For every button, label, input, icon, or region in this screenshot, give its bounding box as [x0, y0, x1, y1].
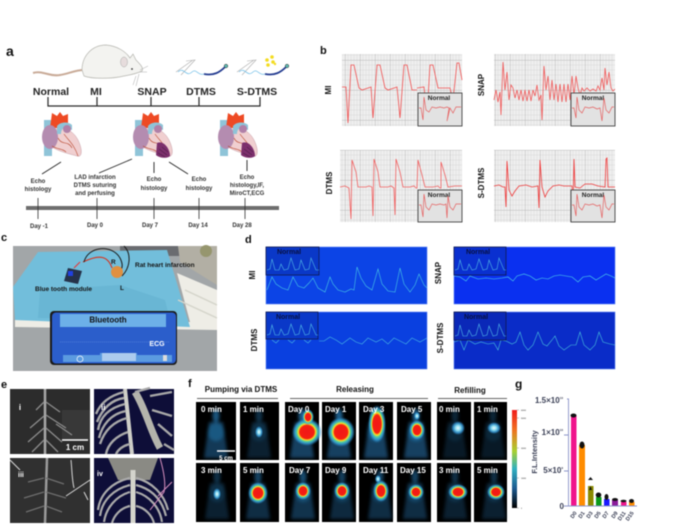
leader lines: [42, 159, 247, 174]
group labels: Normal: [33, 86, 69, 98]
y axis labels: 0: [560, 502, 565, 511]
timeline notes: Echo: [240, 175, 255, 181]
y axis labels: 10: [560, 428, 563, 432]
panel letter g: g: [515, 377, 522, 391]
chart: SNAP ECG: [494, 54, 615, 126]
x axis labels: D11: [617, 511, 628, 522]
tile: 5 min: [240, 463, 279, 522]
timeline notes: Echo: [147, 177, 162, 183]
monitor row labels: [248, 261, 445, 353]
colour scale: 30000: [521, 448, 526, 450]
tile: 0 min: 0 min: [201, 405, 222, 414]
group labels: SNAP: [137, 86, 167, 98]
inset: normal: Normal: [276, 314, 300, 321]
chart row labels: DTMS: [325, 171, 334, 194]
inset: normal: Normal: [428, 95, 450, 102]
panel letter f: f: [188, 378, 192, 390]
tile: Day 5: [397, 402, 431, 460]
inset: normal: [454, 247, 506, 275]
icon: DTMS device: [176, 60, 228, 75]
tile: 3 min: 3 min: [201, 466, 222, 475]
tile: Day 0: Day 0: [288, 405, 310, 414]
inset: normal: [266, 247, 319, 275]
image iv: iv: [97, 471, 103, 478]
tile: 5 min: 5 min: [243, 466, 264, 475]
panel letter a: a: [6, 43, 14, 59]
tile: 1 min: [240, 402, 279, 460]
scale bar: 5 cm: [219, 456, 233, 462]
tile: Day 15: Day 15: [400, 466, 426, 475]
panel letter e: e: [1, 379, 7, 391]
section headings: Refilling: [454, 386, 486, 395]
tile: Day 7: [285, 463, 319, 522]
photo annotations: L: [120, 285, 124, 292]
timeline notes: histology: [25, 187, 52, 193]
tile: 1 min: 1 min: [243, 405, 264, 414]
group labels: DTMS: [186, 86, 216, 98]
x axis labels: D15: [625, 511, 636, 522]
photo annotations: Rat heart infarction: [135, 262, 195, 269]
chart row labels: [324, 73, 486, 198]
inset: normal: Normal: [428, 192, 450, 199]
image i: i: [19, 403, 21, 412]
x axis labels: D0: [570, 511, 579, 520]
group labels: [33, 86, 277, 98]
tile: Day 9: Day 9: [325, 466, 347, 475]
inset: normal: Normal: [582, 95, 604, 102]
group labels: MI: [90, 86, 102, 98]
panel g: bar chart: [515, 377, 637, 522]
panel c: photo of Bluetooth ECG setup: [1, 232, 217, 371]
inset: normal: [266, 312, 318, 339]
phone: ECG: [149, 341, 165, 348]
image iii: iii: [18, 472, 24, 479]
chart row labels: SNAP: [477, 73, 486, 96]
colour scale: 50000: [521, 418, 526, 420]
monitor: DTMS: [266, 312, 427, 369]
monitor row labels: MI: [248, 271, 257, 279]
inset: normal: Normal: [277, 249, 301, 256]
chart: DTMS ECG: [340, 150, 462, 222]
y axis labels: [535, 396, 565, 511]
photo annotations: [35, 259, 195, 293]
photo annotations: Blue tooth module: [35, 286, 92, 293]
inset: normal: Normal: [464, 314, 488, 321]
timeline notes: LAD infarction: [74, 175, 116, 181]
panel b: ECG charts: [320, 45, 615, 222]
monitor: SNAP: [454, 247, 615, 304]
panel letter c: c: [1, 232, 7, 244]
tile: Day 5: Day 5: [401, 405, 423, 414]
y axis labels: 10: [560, 396, 563, 400]
chart: S-DTMS ECG: [494, 150, 615, 222]
timeline bar: [26, 198, 279, 219]
inset: normal: Normal: [466, 249, 490, 256]
bracket: [48, 97, 260, 106]
timeline notes: MiroCT,ECG: [230, 191, 265, 197]
x axis labels: D1: [578, 511, 587, 520]
y axis labels: 1×10: [542, 428, 560, 437]
timeline notes: DTMS suturing: [74, 183, 117, 189]
timeline days: Day 7: [142, 223, 159, 229]
monitor: S-DTMS: [454, 312, 615, 369]
timeline days: Day 28: [232, 223, 252, 229]
y axis title: F.L.Intensity: [530, 430, 539, 474]
monitor row labels: SNAP: [434, 261, 443, 284]
timeline notes: histology,IF,: [230, 183, 264, 189]
tile: refill 1 min: [474, 402, 507, 460]
panel a: study timeline: [6, 43, 289, 230]
icon: heart with SNAP patch: [133, 112, 172, 158]
tile: Day 1: [322, 402, 356, 460]
inset: normal: [454, 312, 506, 340]
image iv: [94, 458, 174, 523]
timeline days: Day -1: [30, 224, 49, 230]
panel f: fluorescence imaging: [188, 378, 526, 522]
tile: Day 7: Day 7: [289, 466, 311, 475]
tile: Day 0: [285, 402, 322, 460]
section headings: [205, 385, 486, 395]
scale bar: [217, 451, 235, 462]
icon: normal heart: [42, 112, 81, 156]
section headings: Releasing: [336, 385, 374, 394]
image i: [10, 389, 90, 454]
photo annotations: R: [111, 259, 116, 266]
y axis labels: 5×10: [543, 466, 561, 475]
tile: refill 5 min: [474, 463, 507, 522]
inset: normal: Normal: [582, 192, 604, 199]
image ii: ii: [101, 403, 105, 412]
chart row labels: MI: [324, 86, 333, 94]
colour scale: 60000: [521, 410, 526, 412]
tile: Day 11: Day 11: [363, 466, 389, 475]
y axis labels: 9: [561, 466, 563, 470]
x axis labels: [570, 511, 636, 522]
tile: refill 0 min: [437, 402, 471, 460]
axes: [564, 399, 637, 506]
y axis labels: 1.5×10: [535, 396, 560, 405]
x axis labels: D7: [602, 511, 611, 520]
panel e: micro-CT images: [1, 379, 174, 523]
tile: refill 3 min: [437, 463, 471, 522]
timeline days: Day 14: [188, 223, 208, 229]
tile: Day 3: [359, 402, 393, 460]
colour scale: 0: [521, 508, 522, 510]
tile: Day 9: [322, 463, 356, 522]
x axis labels: D5: [594, 511, 603, 520]
timeline notes: [25, 175, 265, 197]
icon: rat: [33, 45, 148, 86]
phone: [50, 311, 177, 365]
tile: Day 3: Day 3: [363, 405, 385, 414]
panel letter d: d: [245, 234, 252, 246]
tile: 3 min: [196, 463, 236, 522]
icon: heart with DTMS patch: [218, 112, 257, 158]
image iii: [10, 458, 90, 523]
timeline notes: histology: [186, 186, 213, 192]
tile: Day 15: [397, 463, 431, 522]
photo scene: [13, 245, 217, 371]
data points: [570, 414, 634, 503]
bars: [571, 416, 634, 506]
tile: Day 1: Day 1: [325, 405, 347, 414]
image i: 1 cm: [66, 443, 84, 452]
section headings: Pumping via DTMS: [205, 385, 278, 394]
colour scale: [512, 410, 526, 510]
phone: Bluetooth: [89, 316, 127, 324]
tile: refill 1 min: 1 min: [477, 405, 498, 414]
timeline notes: Echo: [31, 179, 46, 185]
tile: 0 min: [196, 402, 236, 460]
panel letter b: b: [320, 45, 327, 57]
colour scale: 10000: [521, 478, 526, 480]
panel d: ECG on blue monitor: [245, 234, 615, 369]
timeline notes: Echo: [192, 177, 207, 183]
tile: refill 3 min: 3 min: [439, 466, 460, 475]
chart row labels: S-DTMS: [477, 167, 486, 198]
timeline days: Day 0: [87, 223, 104, 229]
timeline notes: histology: [141, 186, 168, 192]
image ii: [94, 388, 174, 454]
tile: refill 5 min: 5 min: [477, 466, 498, 475]
timeline notes: and perfusing: [75, 191, 115, 197]
icon: bluetooth module: [64, 262, 82, 284]
monitor: MI: [266, 247, 427, 304]
tile: Day 11: [359, 463, 393, 522]
x axis labels: D3: [586, 511, 595, 520]
icon: S-DTMS device: [237, 55, 289, 75]
tile: refill 0 min: 0 min: [439, 405, 460, 414]
timeline days: [30, 223, 252, 230]
monitor row labels: S-DTMS: [436, 322, 445, 353]
x axis labels: D9: [611, 511, 620, 520]
image tiles row 1: [196, 402, 507, 460]
chart: MI ECG: [342, 54, 462, 126]
monitor row labels: DTMS: [250, 328, 259, 351]
image tiles row 2: [196, 463, 507, 522]
icon: rat heart: [111, 266, 123, 278]
group labels: S-DTMS: [237, 86, 277, 98]
